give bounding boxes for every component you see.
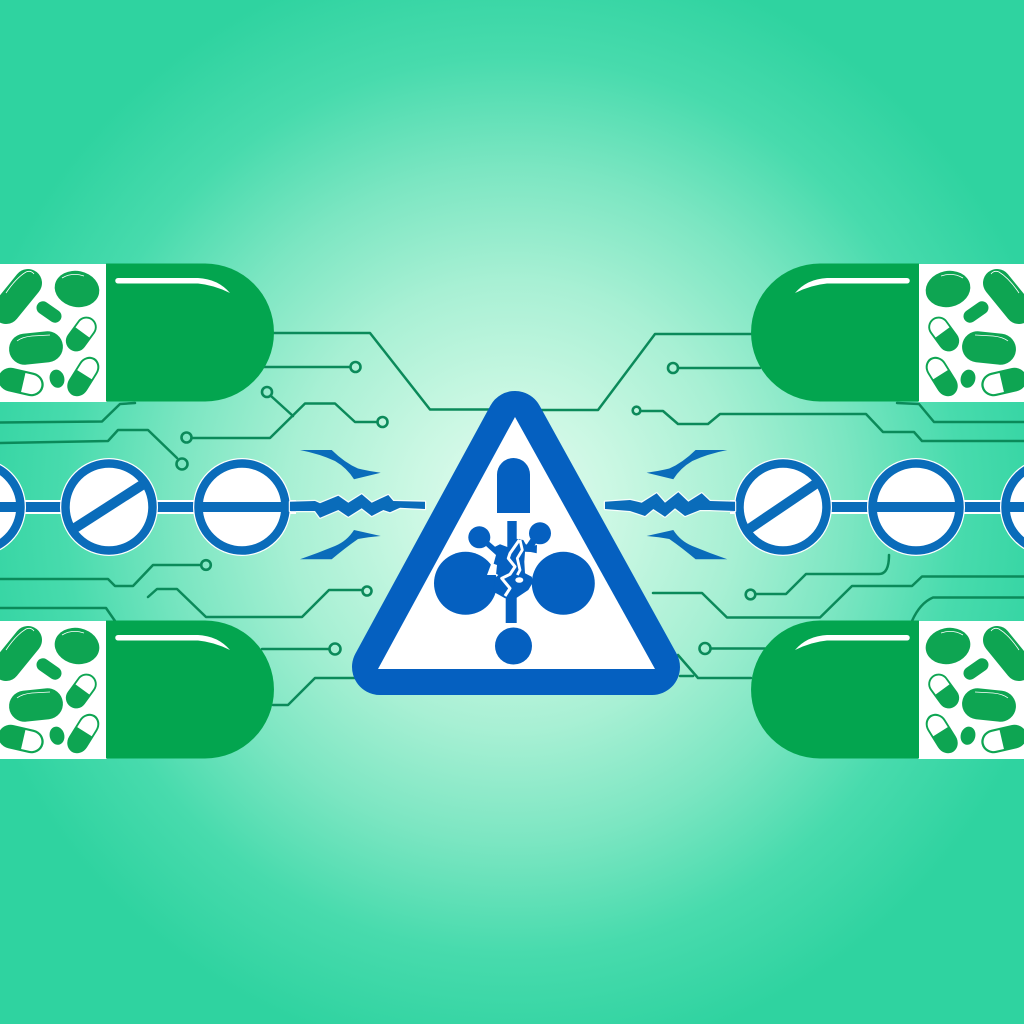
- icon: capsule top: [497, 458, 530, 513]
- left spark marks: [300, 450, 381, 559]
- capsule with pills: bottom left: [0, 620, 274, 759]
- right chain of prohibition signs: [730, 458, 1024, 556]
- capsule with pills: top left: [0, 264, 274, 402]
- capsule with pills: top right: [751, 264, 1024, 402]
- capsule with pills: bottom right: [751, 620, 1024, 759]
- right broken zigzag connection: [605, 492, 735, 517]
- circuit traces: upper right: [540, 334, 1024, 441]
- circuit traces: lower right: [653, 555, 1024, 678]
- right spark marks: [647, 450, 727, 559]
- left chain of prohibition signs: [0, 458, 296, 556]
- icon: broken molecule: [434, 521, 595, 623]
- circuit traces: lower left: [0, 560, 372, 705]
- icon: exclamation dot: [495, 628, 532, 664]
- warning triangle: [378, 417, 655, 669]
- circuit traces: upper left: [0, 333, 495, 470]
- left broken zigzag connection: [290, 494, 425, 518]
